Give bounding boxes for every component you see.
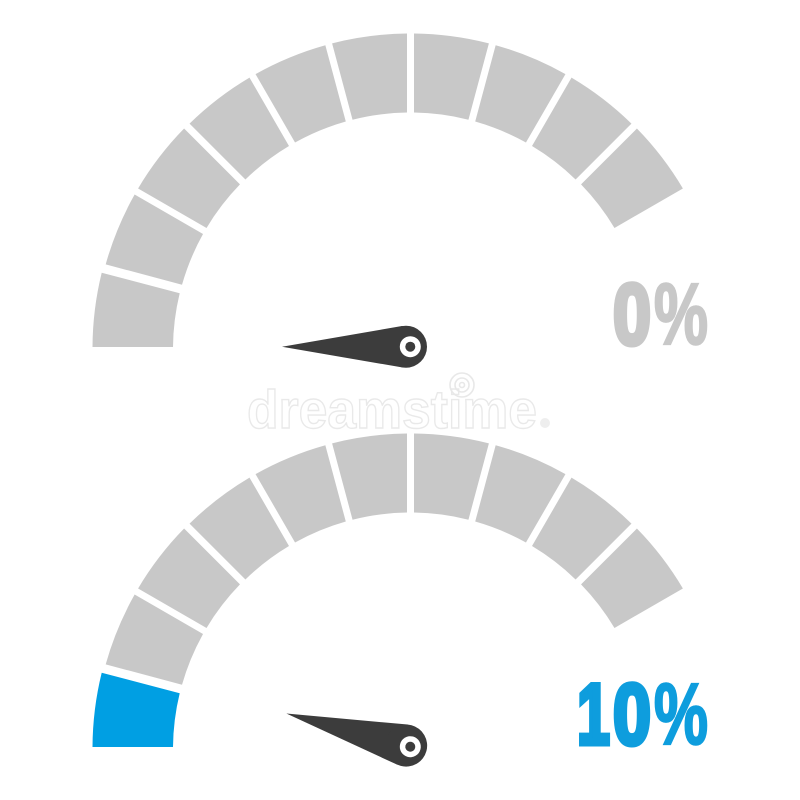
value label: 10%: % [654,667,708,763]
watermark [247,373,550,440]
active blue segment [92,673,180,747]
gauge arc segments [92,24,690,347]
needle at 0 percent [282,326,427,368]
gauge: 10 percent [92,424,708,771]
watermark wordmark: dreamstime [247,380,537,440]
gauge: 0 percent [92,24,708,368]
value label: 10%: 1 [577,667,610,763]
gauge arc segments [92,424,690,747]
needle at 10 percent [281,693,432,771]
value label: 0% [613,267,708,363]
value label: 0%: 0 [613,267,651,363]
value label: 10%: 0 [613,667,651,763]
watermark logo mark [450,373,474,397]
value label: 0%: % [654,267,708,363]
value label: 10% [577,667,708,763]
